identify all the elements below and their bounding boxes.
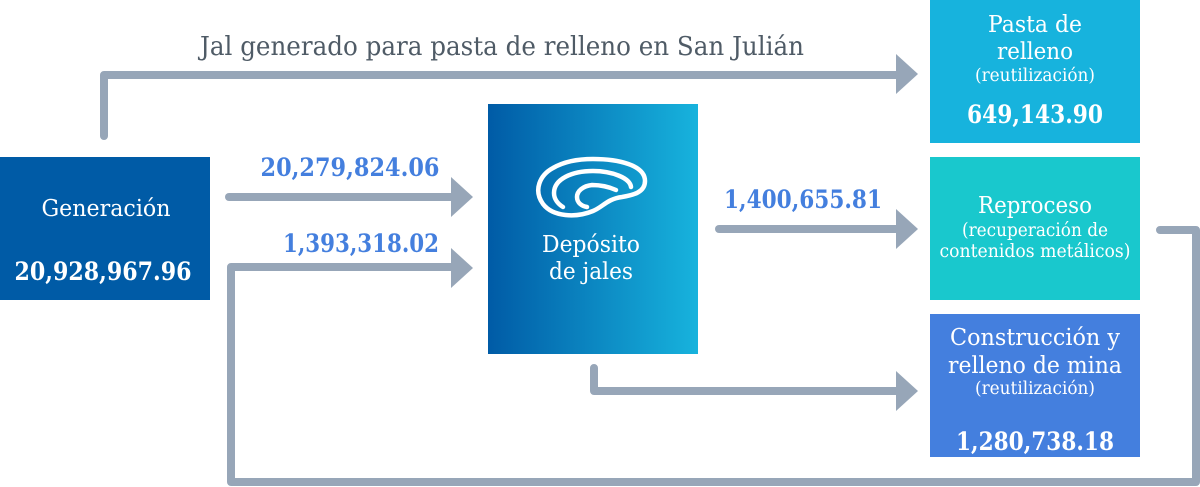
value: flow to reprocess: 1,400,655.81 xyxy=(724,185,882,214)
arrow: generation to deposit xyxy=(229,177,473,217)
value: flow to deposit: 20,279,824.06 xyxy=(260,153,440,182)
arrow: reprocess return to deposit xyxy=(231,230,1196,482)
label: reutilización: (reutilización) xyxy=(975,66,1095,86)
icon: tailings deposit xyxy=(538,159,645,215)
label: de jales: de jales xyxy=(549,259,633,285)
value: construcción: 1,280,738.18 xyxy=(956,427,1114,456)
panel: pasta de relleno xyxy=(930,0,1140,143)
label: recuperación de: (recuperación de xyxy=(962,220,1108,241)
label: relleno: relleno xyxy=(997,39,1073,65)
value: generación: 20,928,967.96 xyxy=(14,257,192,286)
value: pasta de relleno: 649,143.90 xyxy=(967,100,1103,129)
panel: construcción y relleno de mina xyxy=(930,314,1140,457)
heading: jal generado: Jal generado para pasta de relleno en San Julián xyxy=(197,32,804,62)
panel: depósito de jales xyxy=(488,104,698,354)
panel: generación xyxy=(0,157,210,300)
label: reproceso: Reproceso xyxy=(978,193,1092,219)
arrow: generation to pasta de relleno xyxy=(104,54,918,136)
value: reprocess return flow: 1,393,318.02 xyxy=(283,229,439,258)
label: contenidos metálicos: contenidos metálicos) xyxy=(940,241,1130,262)
panel: reproceso xyxy=(930,157,1140,300)
label: depósito: Depósito xyxy=(542,232,640,258)
label: construcción y: Construcción y xyxy=(950,325,1120,351)
label: generación: Generación xyxy=(42,196,171,222)
label: pasta de: Pasta de xyxy=(988,12,1082,38)
label: relleno de mina: relleno de mina xyxy=(948,353,1122,379)
label: reutilización: (reutilización) xyxy=(975,379,1095,399)
arrow: deposit to reprocess xyxy=(719,209,918,249)
arrow: deposit to construction xyxy=(594,368,918,411)
